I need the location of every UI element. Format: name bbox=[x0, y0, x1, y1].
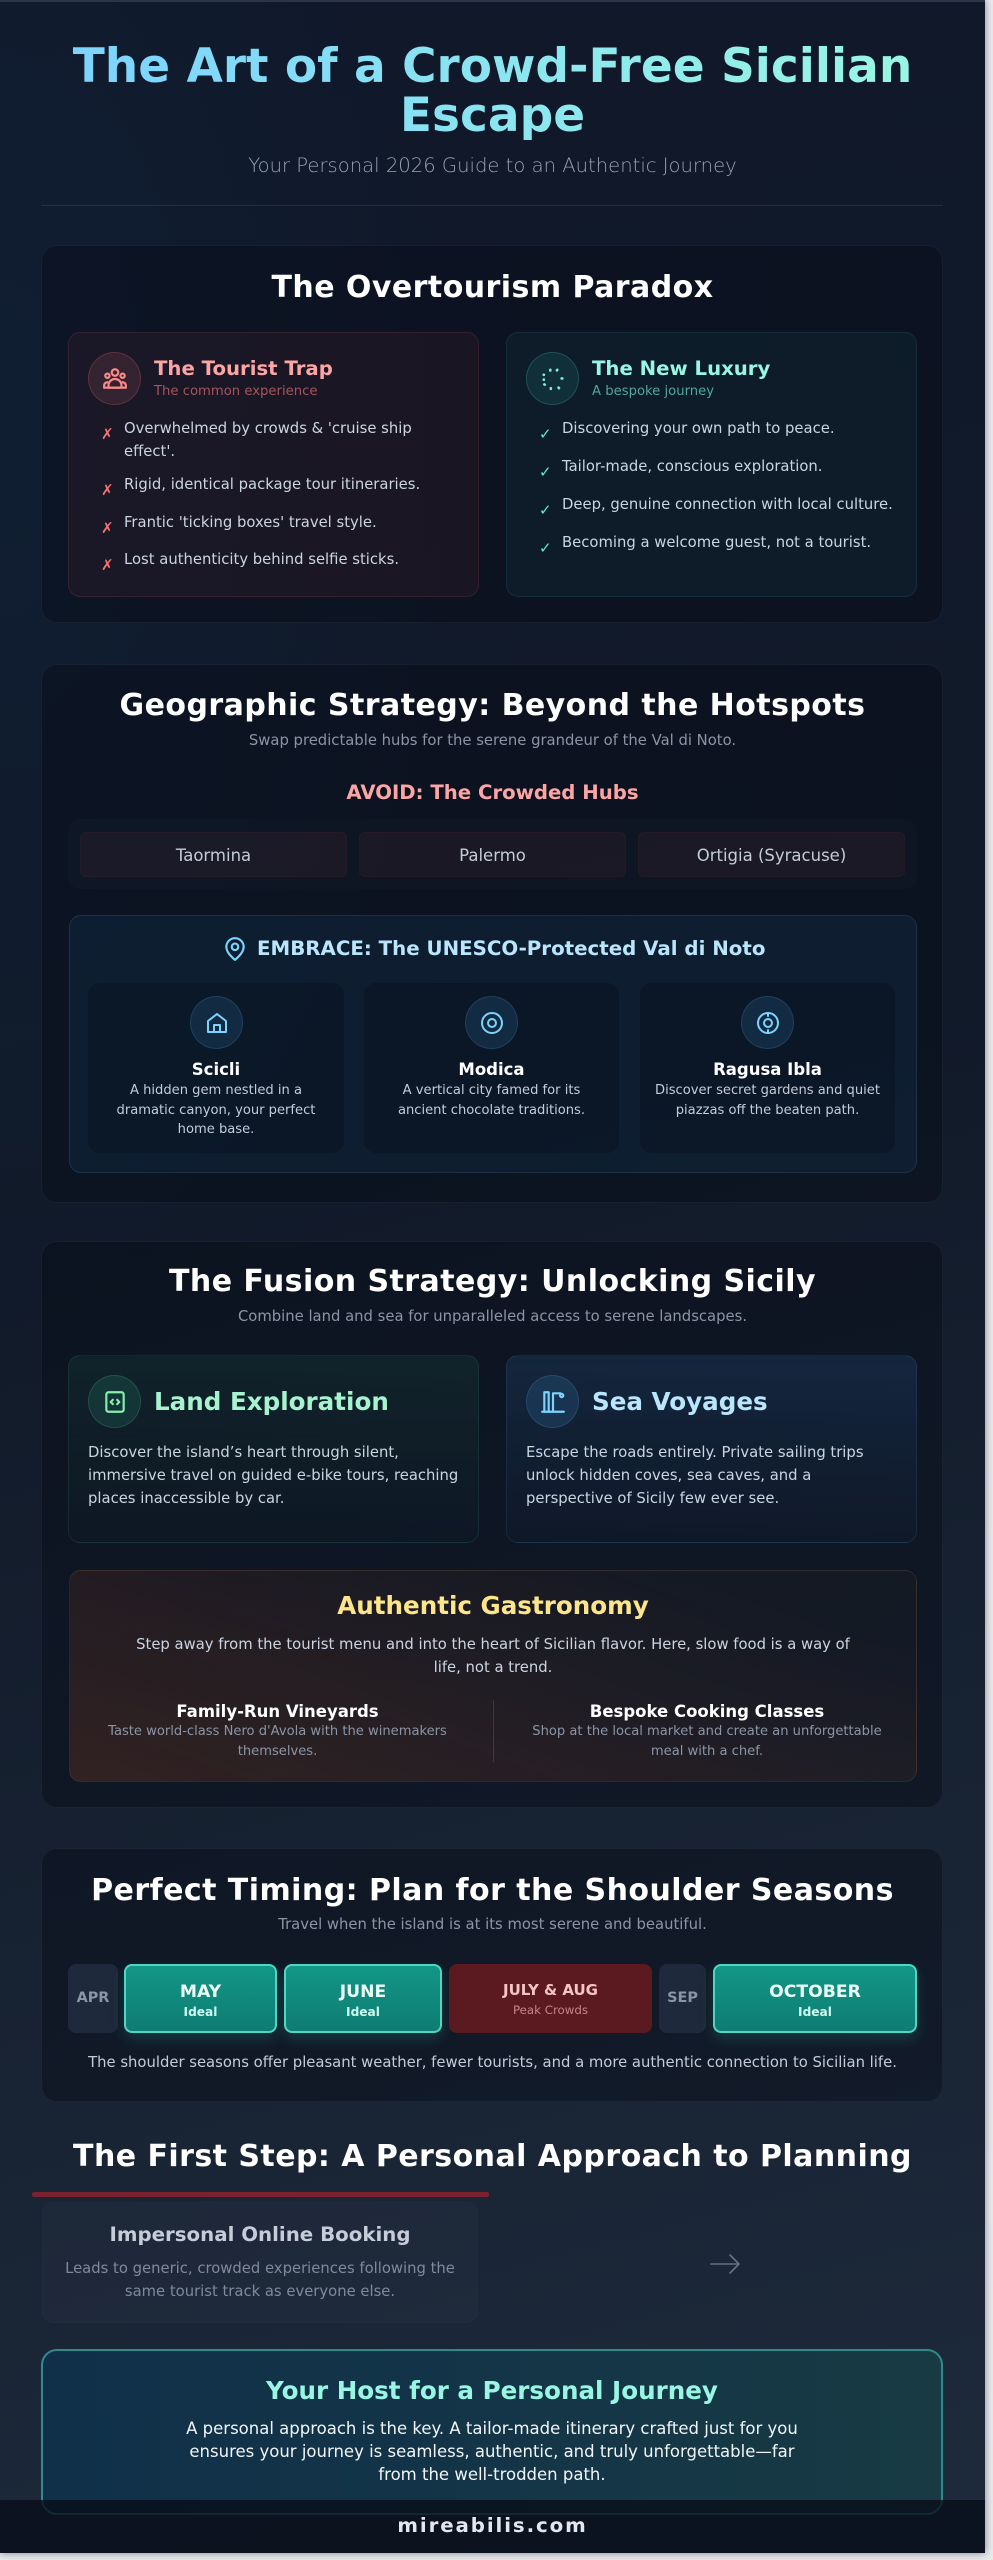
july aug note: Peak Crowds bbox=[513, 2003, 588, 2017]
june note: Ideal bbox=[346, 2005, 380, 2019]
panel: sea voyages bbox=[506, 1355, 917, 1543]
booking text bbox=[65, 2260, 455, 2300]
embrace heading: EMBRACE: The UNESCO-Protected Val di Noto bbox=[257, 937, 765, 960]
town description bbox=[398, 1083, 585, 1118]
timeline bbox=[68, 1964, 921, 2043]
town name: Ragusa Ibla bbox=[713, 1060, 822, 1079]
timing subtitle: Travel when the island is at its most serene and beautiful. bbox=[278, 1916, 707, 1933]
month: JULY AUG bbox=[449, 1964, 652, 2033]
land text bbox=[88, 1444, 458, 1507]
panel: geographic strategy bbox=[41, 664, 943, 1203]
host text: A personal approach is the key. A tailor-made itinerary crafted just for you bbox=[186, 2419, 798, 2438]
gastronomy text bbox=[136, 1636, 850, 1676]
list: tourist trap items bbox=[101, 420, 420, 574]
hub: Taormina: Taormina bbox=[176, 846, 251, 865]
town name: Modica bbox=[458, 1060, 525, 1079]
host text bbox=[186, 2419, 798, 2484]
geographic subtitle: Swap predictable hubs for the serene grandeur of the Val di Noto. bbox=[249, 732, 736, 749]
list: tourist trap items: Overwhelmed by crowds & 'cruise ship bbox=[124, 420, 412, 437]
vineyards text: themselves. bbox=[238, 1744, 317, 1759]
list: tourist trap items: ✗ bbox=[101, 425, 114, 443]
vineyards title: Family-Run Vineyards bbox=[176, 1702, 379, 1721]
gastronomy text: life, not a trend. bbox=[434, 1659, 552, 1676]
month: JUNE bbox=[284, 1964, 442, 2033]
panel: overtourism paradox bbox=[41, 245, 943, 623]
town card: Ragusa Ibla bbox=[640, 983, 895, 1153]
title: The Art of a Crowd-Free Sicilian bbox=[73, 39, 912, 94]
town description: ancient chocolate traditions. bbox=[398, 1103, 585, 1118]
hub: Palermo bbox=[359, 832, 626, 877]
may note: Ideal bbox=[184, 2005, 217, 2019]
month: MAY bbox=[124, 1964, 277, 2033]
host text: ensures your journey is seamless, authentic, and truly unforgettable—far bbox=[189, 2442, 795, 2461]
june label: JUNE bbox=[340, 1982, 386, 2002]
list: new luxury items: ✓ bbox=[539, 539, 552, 557]
sea title: Sea Voyages bbox=[592, 1387, 768, 1416]
heading: fusion strategy: The Fusion Strategy: Unlocking Sicily bbox=[169, 1264, 816, 1299]
list: tourist trap items: Rigid, identical package tour itineraries. bbox=[124, 476, 420, 493]
red strike bar bbox=[32, 2192, 489, 2197]
town description: dramatic canyon, your perfect bbox=[117, 1103, 315, 1118]
list: new luxury items: Tailor-made, conscious exploration. bbox=[562, 458, 823, 475]
panel: land exploration bbox=[68, 1355, 479, 1543]
list: new luxury items: Deep, genuine connection with local culture. bbox=[562, 496, 893, 513]
panel: avoid hubs bbox=[68, 819, 917, 889]
town description: Discover secret gardens and quiet bbox=[655, 1083, 880, 1098]
hub: Ortigia: Ortigia (Syracuse) bbox=[697, 846, 846, 865]
icon: dotted circle bbox=[526, 352, 579, 405]
icon: compass bbox=[741, 996, 794, 1049]
list: new luxury items: Discovering your own path to peace. bbox=[562, 420, 835, 437]
town name: Scicli bbox=[192, 1060, 240, 1079]
subtitle: Your Personal 2026 Guide to an Authentic Journey bbox=[248, 154, 737, 177]
october label: OCTOBER bbox=[769, 1982, 861, 2002]
sea text: unlock hidden coves, sea caves, and a bbox=[526, 1467, 811, 1484]
town description: home base. bbox=[178, 1122, 254, 1137]
cooking text bbox=[532, 1724, 882, 1759]
icon: crowd bbox=[88, 352, 141, 405]
title bbox=[0, 42, 985, 140]
card subtitle: A bespoke journey bbox=[592, 384, 714, 399]
town description: piazzas off the beaten path. bbox=[676, 1103, 859, 1118]
vineyards text: Taste world-class Nero d'Avola with the winemakers bbox=[108, 1724, 447, 1739]
card title: The Tourist Trap bbox=[154, 357, 333, 380]
timing note: The shoulder seasons offer pleasant weather, fewer tourists, and a more authentic connection to Sicilian life. bbox=[88, 2054, 897, 2071]
footer bar bbox=[0, 2500, 985, 2553]
month: APR: APR bbox=[77, 1990, 109, 2006]
header divider bbox=[41, 205, 943, 206]
sea text: perspective of Sicily few ever see. bbox=[526, 1490, 779, 1507]
sea text: Escape the roads entirely. Private sailing trips bbox=[526, 1444, 864, 1461]
land title: Land Exploration bbox=[154, 1387, 389, 1416]
booking text: same tourist track as everyone else. bbox=[125, 2283, 395, 2300]
cooking title: Bespoke Cooking Classes bbox=[590, 1702, 824, 1721]
list: tourist trap items: ✗ bbox=[101, 481, 114, 499]
heading: overtourism: The Overtourism Paradox bbox=[271, 270, 714, 305]
panel: the tourist trap bbox=[68, 332, 479, 597]
host title: Your Host for a Personal Journey bbox=[266, 2376, 718, 2405]
july aug label: JULY & AUG bbox=[503, 1981, 598, 1999]
list: new luxury items: ✓ bbox=[539, 501, 552, 519]
month: SEP: SEP bbox=[667, 1990, 698, 2006]
gastronomy title: Authentic Gastronomy bbox=[337, 1591, 649, 1620]
footer url: mireabilis.com bbox=[397, 2514, 588, 2537]
icon: sea bbox=[526, 1375, 579, 1428]
cooking text: meal with a chef. bbox=[651, 1744, 763, 1759]
booking text: Leads to generic, crowded experiences following the bbox=[65, 2260, 455, 2277]
october note: Ideal bbox=[798, 2005, 832, 2019]
gastronomy text: Step away from the tourist menu and into the heart of Sicilian flavor. Here, slow food is a way of bbox=[136, 1636, 850, 1653]
panel: authentic gastronomy bbox=[69, 1570, 917, 1782]
panel: embrace val di noto bbox=[69, 915, 917, 1173]
panel: the new luxury bbox=[506, 332, 917, 597]
booking title: Impersonal Online Booking bbox=[109, 2223, 411, 2246]
town description: A hidden gem nestled in a bbox=[130, 1083, 302, 1098]
hub: Palermo: Palermo bbox=[459, 846, 526, 865]
divider bbox=[493, 1700, 494, 1762]
hub: Ortigia bbox=[638, 832, 905, 877]
town description: A vertical city famed for its bbox=[403, 1083, 580, 1098]
list: tourist trap items: ✗ bbox=[101, 556, 114, 574]
month: OCTOBER bbox=[713, 1964, 917, 2033]
card title: The New Luxury bbox=[592, 357, 770, 380]
land text: places inaccessible by car. bbox=[88, 1490, 284, 1507]
icon: home bbox=[190, 996, 243, 1049]
land text: immersive travel on guided e-bike tours, reaching bbox=[88, 1467, 458, 1484]
panel: your host bbox=[41, 2349, 943, 2515]
town description bbox=[117, 1083, 316, 1137]
list: tourist trap items: ✗ bbox=[101, 519, 114, 537]
sea text bbox=[526, 1444, 864, 1507]
land text: Discover the island’s heart through silent, bbox=[88, 1444, 399, 1461]
icon: map pin bbox=[225, 937, 245, 961]
heading: perfect timing: Perfect Timing: Plan for the Shoulder Seasons bbox=[91, 1873, 894, 1908]
avoid heading: AVOID: The Crowded Hubs bbox=[346, 781, 639, 804]
panel: impersonal booking bbox=[42, 2202, 478, 2323]
list: new luxury items bbox=[539, 420, 893, 557]
hub: Taormina bbox=[80, 832, 347, 877]
list: tourist trap items: effect'. bbox=[124, 443, 175, 460]
vineyards block bbox=[108, 1702, 447, 1759]
arrow bbox=[710, 2254, 740, 2274]
cooking block bbox=[532, 1702, 882, 1759]
panel: perfect timing bbox=[41, 1848, 943, 2102]
list: tourist trap items: Frantic 'ticking boxes' travel style. bbox=[124, 514, 377, 531]
host text: from the well-trodden path. bbox=[378, 2465, 606, 2484]
list: new luxury items: ✓ bbox=[539, 425, 552, 443]
heading: first step: The First Step: A Personal Approach to Planning bbox=[73, 2139, 912, 2174]
cooking text: Shop at the local market and create an unforgettable bbox=[532, 1724, 882, 1739]
town card: Modica bbox=[364, 983, 619, 1153]
may label: MAY bbox=[180, 1982, 221, 2002]
fusion subtitle: Combine land and sea for unparalleled access to serene landscapes. bbox=[238, 1308, 747, 1325]
icon: land bbox=[88, 1375, 141, 1428]
list: new luxury items: ✓ bbox=[539, 463, 552, 481]
icon: target bbox=[465, 996, 518, 1049]
list: new luxury items: Becoming a welcome guest, not a tourist. bbox=[562, 534, 871, 551]
month: APR bbox=[68, 1964, 118, 2033]
town description bbox=[655, 1083, 880, 1118]
vineyards text bbox=[108, 1724, 447, 1759]
month: SEP bbox=[659, 1964, 706, 2033]
list: tourist trap items: Lost authenticity behind selfie sticks. bbox=[124, 551, 399, 568]
card subtitle: The common experience bbox=[154, 384, 317, 399]
town card: Scicli bbox=[88, 983, 344, 1153]
heading: geographic strategy: Geographic Strategy: Beyond the Hotspots bbox=[120, 688, 865, 723]
panel: fusion strategy bbox=[41, 1241, 943, 1808]
title: Escape bbox=[400, 88, 585, 143]
